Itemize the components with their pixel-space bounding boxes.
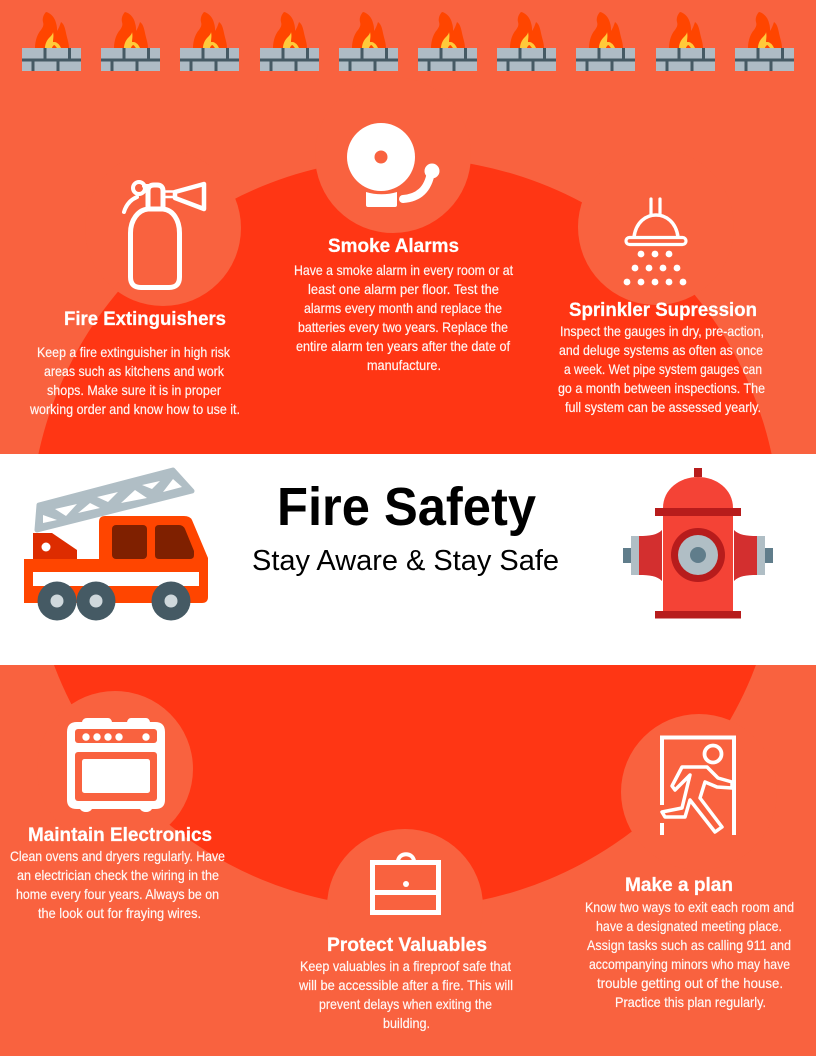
subtitle: Stay Aware & Stay Safe — [252, 545, 559, 577]
text: make a plan: accompanying minors who may have — [589, 956, 790, 972]
text: smoke alarms — [294, 235, 513, 373]
icon: sprinkler — [624, 199, 686, 285]
white title band — [0, 454, 816, 665]
icon: fire extinguisher — [124, 182, 204, 288]
text: protect valuables — [298, 934, 513, 1031]
text: maintain electronics — [10, 824, 225, 921]
text: fire extinguishers: areas such as kitchens and work — [44, 363, 225, 379]
text: sprinkler supression: full system can be assessed yearly. — [565, 399, 761, 415]
text: fire extinguishers: Fire Extinguishers — [64, 308, 226, 330]
icon: fire hydrant — [623, 468, 773, 618]
text: make a plan: Know two ways to exit each room and — [585, 899, 794, 915]
text: make a plan: trouble getting out of the house. — [597, 975, 783, 991]
text: protect valuables: will be accessible after a fire. This will — [298, 977, 513, 993]
text: maintain electronics: the look out for fraying wires. — [38, 905, 201, 921]
icon: oven — [67, 718, 165, 812]
text: protect valuables: Keep valuables in a fireproof safe that — [300, 958, 511, 974]
text: fire extinguishers — [29, 308, 240, 417]
text: maintain electronics: Maintain Electronics — [28, 824, 212, 846]
text: fire extinguishers: working order and know how to use it. — [29, 401, 240, 417]
text: fire extinguishers: Keep a fire extinguisher in high risk — [37, 344, 231, 360]
text: maintain electronics: an electrician check the wiring in the — [17, 867, 219, 883]
text: protect valuables: Protect Valuables — [327, 934, 487, 956]
text: sprinkler supression: a week. Wet pipe system gauges can — [564, 361, 762, 377]
title: Fire Safety — [277, 477, 536, 537]
text: fire extinguishers: shops. Make sure it is in proper — [47, 382, 221, 398]
text: smoke alarms: Have a smoke alarm in every room or at — [294, 262, 513, 278]
text: smoke alarms: batteries every two years. Replace the — [298, 319, 508, 335]
text: sprinkler supression: and deluge systems as often as once — [559, 342, 763, 358]
text: maintain electronics: Clean ovens and dryers regularly. Have — [10, 848, 225, 864]
text: smoke alarms: manufacture. — [367, 357, 441, 373]
text: smoke alarms: least one alarm per floor. Test the — [308, 281, 499, 297]
icon: briefcase safe — [372, 854, 439, 912]
text: make a plan — [585, 874, 794, 1010]
text: maintain electronics: home every four years. Always be on — [16, 886, 219, 902]
icon: fire truck — [24, 470, 208, 620]
text: make a plan: have a designated meeting place. — [596, 918, 782, 934]
text: sprinkler supression: Sprinkler Supression — [569, 299, 757, 321]
icon: bell — [347, 123, 440, 207]
text: smoke alarms: alarms every month and replace the — [304, 300, 502, 316]
text: protect valuables: prevent delays when exiting the — [319, 996, 492, 1012]
row of burning brick walls — [22, 12, 794, 71]
text: smoke alarms: Smoke Alarms — [328, 235, 459, 257]
text: make a plan: Assign tasks such as calling 911 and — [587, 937, 791, 953]
text: sprinkler supression: go a month between inspections. The — [558, 380, 765, 396]
icon backdrop circles — [37, 77, 777, 985]
text: make a plan: Practice this plan regularly. — [615, 994, 766, 1010]
text: smoke alarms: entire alarm ten years after the date of — [296, 338, 510, 354]
large red circle — [30, 158, 780, 908]
text: sprinkler supression: Inspect the gauges in dry, pre-action, — [560, 323, 764, 339]
text: make a plan: Make a plan — [625, 874, 733, 896]
text: sprinkler supression — [558, 299, 765, 415]
icon: person running out door — [662, 738, 734, 835]
text: protect valuables: building. — [383, 1015, 430, 1031]
